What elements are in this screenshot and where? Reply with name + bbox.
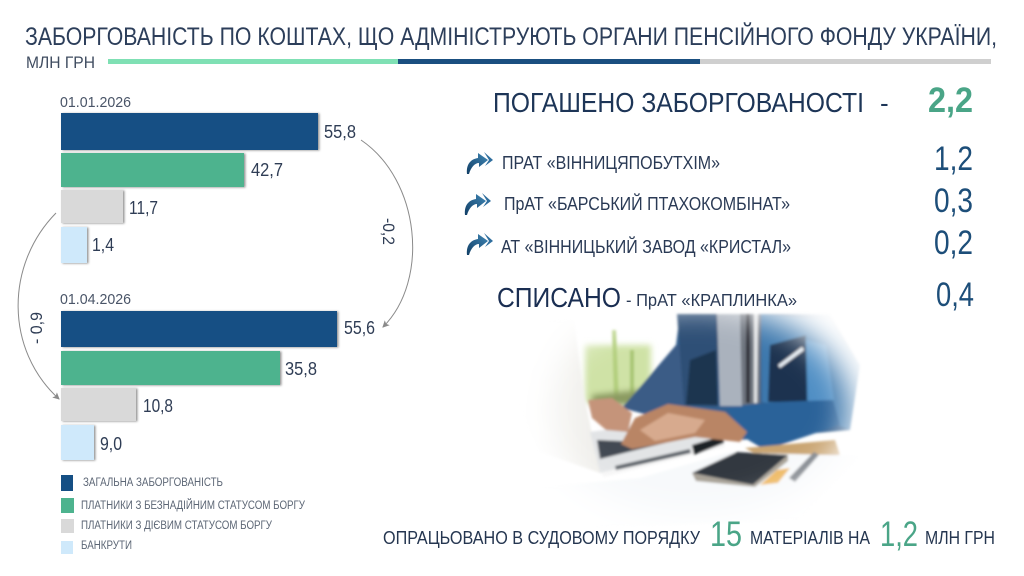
chart: 01.04.2026: 35,8 [285, 359, 317, 379]
item: Barskyi: 0,3 [934, 182, 973, 220]
item: written off [497, 276, 974, 314]
pen [789, 452, 819, 482]
arrow: change in active-status debt [18, 213, 59, 399]
heading: repaid debt: ПОГАШЕНО ЗАБОРГОВАНОСТІ [493, 87, 864, 118]
jacket front [677, 314, 718, 407]
item: written off: СПИСАНО [497, 282, 621, 313]
sleeve cuff [727, 400, 840, 450]
checked tie [740, 314, 761, 405]
title [25, 21, 997, 72]
footer: court materials: МЛН ГРН [925, 527, 995, 548]
chart: 01.01.2026: 42,7 [251, 160, 283, 180]
photo: hands typing on a laptop [558, 312, 860, 489]
left sleeve [626, 346, 682, 410]
footer: court materials: 15 [710, 515, 742, 554]
arrow: change in total debt [361, 140, 413, 327]
shirt [717, 314, 742, 406]
item: Vinnytsiapobutkhim [467, 140, 973, 178]
icon: arrow [467, 233, 493, 255]
chart: 01.01.2026 [60, 94, 356, 263]
heading: repaid debt [493, 81, 973, 120]
title rule [108, 59, 991, 64]
right hand [621, 404, 747, 449]
chart: 01.01.2026: 01.01.2026 [60, 94, 131, 111]
icon: arrow [465, 193, 491, 215]
desk [744, 438, 840, 456]
item: Vinnytsiapobutkhim: ПРАТ «ВІННИЦЯПОБУТХІМ» [502, 153, 720, 173]
legend [61, 475, 306, 554]
item: written off: - ПрАТ «КРАПЛИНКА» [626, 290, 797, 310]
paper [692, 451, 836, 488]
laptop lid [558, 348, 600, 472]
chart: 01.04.2026: 9,0 [100, 434, 122, 454]
chart: 01.04.2026: 01.04.2026 [60, 291, 131, 308]
phone [692, 452, 788, 485]
jacket base [622, 314, 860, 440]
chart: 01.04.2026: 10,8 [143, 396, 173, 416]
item: Kristal [467, 224, 973, 262]
legend: БАНКРУТИ [81, 540, 132, 552]
item: Barskyi [465, 182, 973, 220]
foliage [585, 345, 651, 403]
item: written off: 0,4 [936, 276, 974, 314]
arrow: change in active-status debt: - 0,9 [27, 312, 46, 344]
heading: repaid debt: - [880, 88, 889, 118]
chart: 01.01.2026: 55,8 [324, 122, 356, 142]
orange note [760, 468, 790, 485]
title: МЛН ГРН [26, 54, 95, 72]
chart: 01.01.2026: 1,4 [92, 235, 114, 255]
laptop base [590, 430, 712, 473]
icon: arrow [467, 152, 493, 174]
footer: court materials [383, 515, 995, 554]
chart: 01.04.2026: 55,6 [344, 318, 375, 338]
jacket right [761, 314, 860, 430]
item: Kristal: 0,2 [934, 224, 973, 262]
chart: 01.01.2026: 11,7 [129, 198, 158, 218]
legend: ПЛАТНИКИ З ДІЄВИМ СТАТУСОМ БОРГУ [81, 520, 273, 532]
item: Kristal: АТ «ВІННИЦЬКИЙ ЗАВОД «КРИСТАЛ» [501, 236, 791, 257]
legend: ЗАГАЛЬНА ЗАБОРГОВАНІСТЬ [83, 477, 223, 489]
footer: court materials: МАТЕРІАЛІВ НА [750, 527, 871, 548]
chart: 01.04.2026 [60, 291, 375, 460]
legend: ПЛАТНИКИ З БЕЗНАДІЙНИМ СТАТУСОМ БОРГУ [81, 499, 306, 512]
footer: court materials: 1,2 [880, 515, 918, 554]
item: Barskyi: ПрАТ «БАРСЬКИЙ ПТАХОКОМБІНАТ» [504, 193, 790, 214]
item: Vinnytsiapobutkhim: 1,2 [934, 140, 973, 178]
footer: court materials: ОПРАЦЬОВАНО В СУДОВОМУ ПОРЯДКУ [383, 527, 700, 548]
left hand [588, 398, 632, 432]
arrow: change in total debt: -0,2 [379, 218, 398, 245]
heading: repaid debt: 2,2 [928, 81, 973, 120]
